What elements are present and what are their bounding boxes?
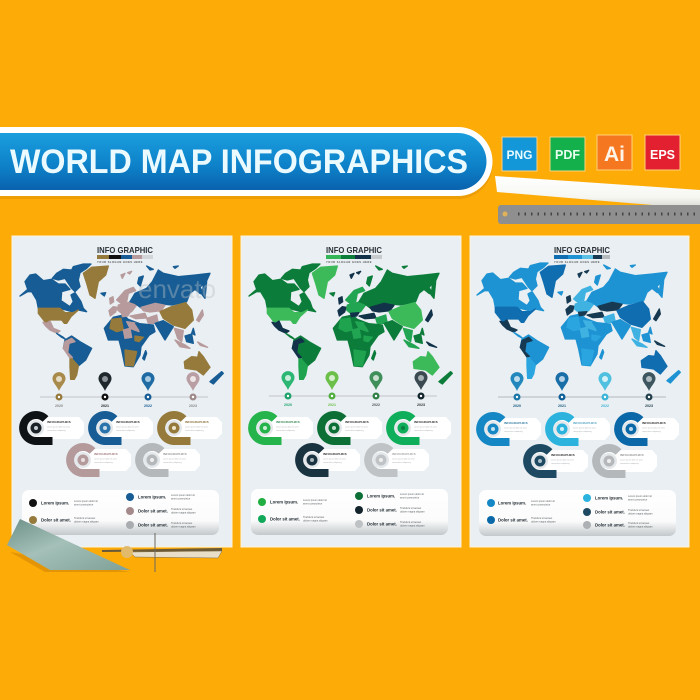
pin: 2021: 2021 xyxy=(101,404,109,408)
callout 4: Lorem ipsum dolor sit amet xyxy=(551,458,574,462)
callout 3: consectetur adipiscing xyxy=(642,430,661,433)
pin: 2021 xyxy=(556,372,568,408)
badge: PNG: PNG xyxy=(506,148,533,162)
legend box: dolore magna aliquam xyxy=(74,520,99,524)
callout 1: INFOGRAPHICS xyxy=(276,420,300,424)
legend box: dolore magna aliquam xyxy=(171,512,196,514)
tagline: YOUR SLOGAN GOES HERE xyxy=(554,260,600,264)
legend box: Dolor sit amet. xyxy=(138,522,168,528)
callout 5: consectetur adipiscing xyxy=(392,461,411,464)
pin: 2021: 2021 xyxy=(328,403,336,407)
heading colour bar xyxy=(97,255,153,259)
legend box: Dolor sit amet. xyxy=(498,518,528,522)
callout 5: INFOGRAPHICS xyxy=(163,452,187,456)
pin: 2022 xyxy=(370,371,382,407)
callout 1: INFOGRAPHICS xyxy=(47,420,71,424)
callout 3: INFOGRAPHICS xyxy=(642,421,666,425)
pin: 2021 xyxy=(326,371,338,407)
legend box: Lorem ipsum dolor sit xyxy=(74,500,98,503)
world map xyxy=(477,263,680,383)
callout 1 xyxy=(23,415,84,441)
legend box: Tincidunt ut laoreet xyxy=(531,517,552,520)
callout 1 xyxy=(252,415,313,441)
callout 1: Lorem ipsum dolor sit amet xyxy=(504,426,527,430)
callout 3: consectetur adipiscing xyxy=(414,429,433,432)
callout 2: Lorem ipsum dolor sit amet xyxy=(345,426,368,428)
legend box: dolore magna aliquam xyxy=(303,520,328,522)
callout 2: INFOGRAPHICS xyxy=(116,420,140,424)
timeline xyxy=(40,372,208,408)
pin: 2020: 2020 xyxy=(284,403,292,407)
legend box: Lorem Ipsum. xyxy=(498,500,526,506)
pin: 2020 xyxy=(52,372,66,408)
watermark: envato xyxy=(138,274,216,304)
badge: EPS: EPS xyxy=(650,148,675,162)
world map xyxy=(249,264,452,384)
legend box: Lorem ipsum dolor sit xyxy=(628,495,652,498)
legend box: Tincidunt ut laoreet xyxy=(303,516,324,519)
legend box xyxy=(22,490,219,535)
badge: EPS xyxy=(645,135,680,170)
legend box: Lorem ipsum dolor sit xyxy=(400,493,424,496)
pin: 2023 xyxy=(414,371,428,407)
panel: green infographic xyxy=(241,236,461,547)
callout 2: consectetur adipiscing xyxy=(573,430,592,433)
callout 3: Lorem ipsum dolor sit amet xyxy=(414,426,437,428)
callout 5: Lorem ipsum dolor sit amet xyxy=(620,458,643,462)
callout 3: INFOGRAPHICS xyxy=(185,420,209,424)
panel: light blue infographic xyxy=(470,236,689,547)
callout 4: Lorem ipsum dolor sit amet xyxy=(323,458,346,460)
callout 4: consectetur adipiscing xyxy=(551,462,570,465)
legend box: amet consectetur xyxy=(303,502,322,506)
banner: title: WORLD MAP INFOGRAPHICS xyxy=(10,143,468,181)
pin: 2023 xyxy=(642,372,656,408)
pin: 2020: 2020 xyxy=(55,404,63,408)
legend box: Tincidunt ut laoreet xyxy=(171,522,192,525)
callout 4: INFOGRAPHICS xyxy=(323,452,347,456)
pin: 2023: 2023 xyxy=(189,404,197,408)
pin: 2022: 2022 xyxy=(372,403,380,407)
tagline: YOUR SLOGAN GOES HERE xyxy=(326,260,372,264)
legend box: amet consectetur xyxy=(531,504,550,506)
legend box: amet consectetur xyxy=(171,498,190,500)
pin: 2023: 2023 xyxy=(417,403,425,407)
panel background xyxy=(12,236,232,547)
callout 2 xyxy=(92,415,153,441)
pin: 2023 xyxy=(186,372,200,408)
pin: 2022 xyxy=(142,372,154,408)
legend box: Dolor sit amet. xyxy=(367,508,397,512)
legend box: amet consectetur xyxy=(628,498,647,502)
callout 2 xyxy=(321,415,382,441)
badge: Ai xyxy=(597,135,632,170)
callout 3 xyxy=(161,415,222,441)
legend box: dolore magna aliquam xyxy=(628,526,653,528)
panel background xyxy=(241,236,461,547)
callout 2: INFOGRAPHICS xyxy=(573,421,597,425)
badge: Ai: Ai xyxy=(604,143,625,166)
pin: 2020 xyxy=(282,371,294,407)
format badges xyxy=(502,135,680,171)
callout 3: INFOGRAPHICS xyxy=(414,420,438,424)
steel ruler xyxy=(498,205,700,224)
callout 3 xyxy=(390,415,451,441)
legend box: Lorem Ipsum. xyxy=(138,494,166,500)
legend box: Tincidunt ut laoreet xyxy=(171,508,192,511)
callout 2: Lorem ipsum dolor sit amet xyxy=(573,426,596,430)
callout 5 xyxy=(596,448,657,474)
legend box: Lorem Ipsum. xyxy=(270,500,298,504)
callout 4: INFOGRAPHICS xyxy=(94,452,118,456)
heading: INFO GRAPHIC xyxy=(554,245,610,255)
callout 2: Lorem ipsum dolor sit amet xyxy=(116,426,139,428)
legend box: Lorem ipsum dolor sit xyxy=(171,494,195,497)
callout 5 xyxy=(368,447,429,473)
callout 1: Lorem ipsum dolor sit amet xyxy=(276,426,299,428)
badge: PNG xyxy=(502,137,537,171)
callout 5: consectetur adipiscing xyxy=(163,461,182,464)
pin: 2022: 2022 xyxy=(601,404,609,408)
callout 4: consectetur adipiscing xyxy=(94,461,113,464)
panel background xyxy=(470,236,689,547)
banner: title xyxy=(0,127,493,199)
callout 2 xyxy=(549,416,610,442)
badge: PDF xyxy=(550,137,585,171)
callout 4 xyxy=(70,447,131,473)
callout 5: Lorem ipsum dolor sit amet xyxy=(392,458,415,460)
paper roll xyxy=(495,176,700,209)
drafting compass xyxy=(102,533,222,572)
callout 2: consectetur adipiscing xyxy=(345,429,364,432)
callout 5: INFOGRAPHICS xyxy=(620,453,644,457)
world map xyxy=(20,264,223,384)
callout 1: Lorem ipsum dolor sit amet xyxy=(47,426,70,428)
legend box: Tincidunt ut laoreet xyxy=(74,517,95,520)
legend box: Lorem ipsum dolor sit xyxy=(531,500,555,503)
callout 5 xyxy=(139,447,200,473)
pin: 2020 xyxy=(510,372,524,408)
callout 3: consectetur adipiscing xyxy=(185,429,204,432)
pin: 2023: 2023 xyxy=(645,404,653,408)
legend box: Dolor sit amet. xyxy=(138,508,168,514)
callout 3: Lorem ipsum dolor sit amet xyxy=(185,426,208,428)
callout 5: consectetur adipiscing xyxy=(620,462,639,465)
legend box: Lorem Ipsum. xyxy=(367,494,395,498)
legend box: Dolor sit amet. xyxy=(367,522,397,526)
callout 4: consectetur adipiscing xyxy=(323,461,342,464)
legend box: Tincidunt ut laoreet xyxy=(628,509,649,512)
heading: INFO GRAPHIC xyxy=(326,245,382,255)
legend box: amet consectetur xyxy=(74,504,93,506)
legend box xyxy=(251,489,448,535)
timeline xyxy=(269,371,437,407)
legend box: Tincidunt ut laoreet xyxy=(400,521,421,524)
legend box: Dolor sit amet. xyxy=(270,516,300,522)
legend box: amet consectetur xyxy=(400,496,419,500)
panel: blue and brown infographic xyxy=(12,236,232,547)
callout 1: consectetur adipiscing xyxy=(276,429,295,432)
badge: PDF: PDF xyxy=(555,148,580,162)
timeline xyxy=(498,372,666,408)
legend box: dolore magna aliquam xyxy=(400,524,425,528)
callout 3 xyxy=(618,416,679,442)
pin: 2020: 2020 xyxy=(513,404,521,408)
legend box: Tincidunt ut laoreet xyxy=(628,522,649,525)
legend box xyxy=(479,490,676,536)
legend box: dolore magna aliquam xyxy=(531,520,556,524)
callout 4 xyxy=(527,448,588,474)
legend box: dolore magna aliquam xyxy=(628,512,653,516)
legend box: dolore magna aliquam xyxy=(171,526,196,528)
legend box: Tincidunt ut laoreet xyxy=(400,507,421,510)
callout 4: Lorem ipsum dolor sit amet xyxy=(94,458,117,460)
legend box: Lorem Ipsum. xyxy=(595,496,623,500)
callout 3: Lorem ipsum dolor sit amet xyxy=(642,426,665,430)
legend box: Lorem ipsum dolor sit xyxy=(303,499,327,502)
pin: 2021: 2021 xyxy=(558,404,566,408)
blueprint tube xyxy=(7,519,130,572)
tagline: YOUR SLOGAN GOES HERE xyxy=(97,260,143,264)
callout 4: INFOGRAPHICS xyxy=(551,453,575,457)
legend box: Dolor sit amet. xyxy=(595,522,625,528)
legend box: Dolor sit amet. xyxy=(41,518,71,522)
pin: 2021 xyxy=(98,372,112,408)
callout 5: Lorem ipsum dolor sit amet xyxy=(163,458,186,460)
heading colour bar xyxy=(326,255,382,259)
pin: 2022 xyxy=(598,372,612,408)
legend box: Lorem Ipsum. xyxy=(41,500,69,506)
callout 4 xyxy=(299,447,360,473)
callout 2: INFOGRAPHICS xyxy=(345,420,369,424)
legend box: Dolor sit amet. xyxy=(595,510,625,514)
callout 2: consectetur adipiscing xyxy=(116,429,135,432)
callout 1: consectetur adipiscing xyxy=(47,429,66,432)
heading colour bar xyxy=(554,255,610,259)
heading: INFO GRAPHIC xyxy=(97,245,153,255)
legend box: dolore magna aliquam xyxy=(400,510,425,514)
callout 1: consectetur adipiscing xyxy=(504,430,523,433)
pin: 2022: 2022 xyxy=(144,404,152,408)
callout 5: INFOGRAPHICS xyxy=(392,452,416,456)
callout 1 xyxy=(480,416,541,442)
callout 1: INFOGRAPHICS xyxy=(504,421,528,425)
